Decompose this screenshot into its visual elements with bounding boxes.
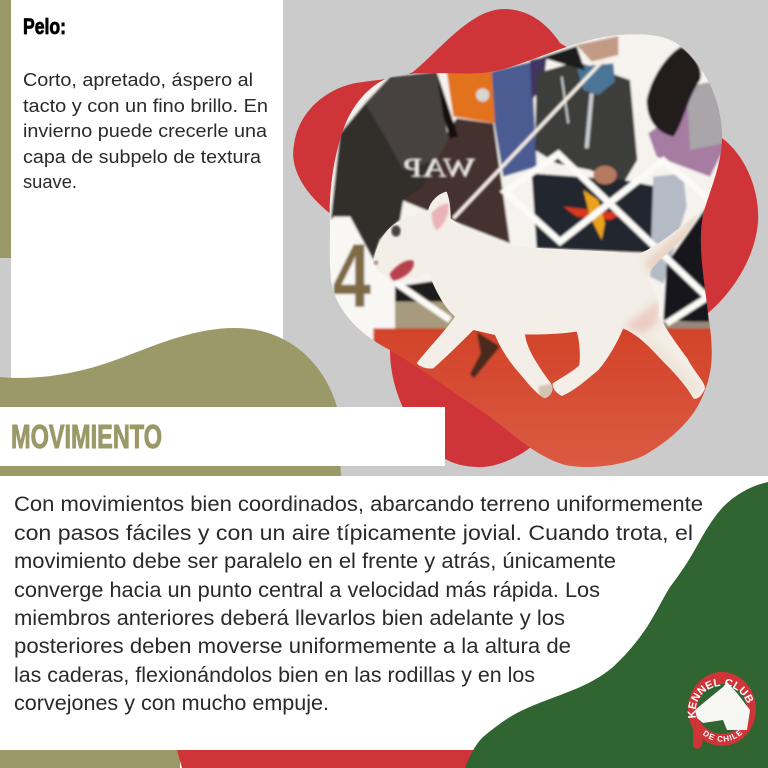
handler — [330, 102, 430, 260]
text block: pelo description — [23, 69, 268, 192]
text block: movimiento description: miembros anteriores deberá llevarlos bien adelante y los — [14, 607, 565, 630]
text block: pelo description: suave. — [23, 171, 77, 192]
green corner shape — [465, 482, 768, 768]
hanging brown object — [470, 332, 500, 378]
grey background — [0, 0, 768, 476]
logo: Kennel Club de Chile: DE CHILE — [702, 730, 742, 742]
text block: movimiento description: con pasos fáciles y con un aire típicamente jovial. Cuando trota, el — [14, 522, 693, 545]
ear — [432, 203, 449, 230]
number card: 4 — [333, 227, 371, 327]
spectators — [395, 47, 725, 330]
white lower area — [0, 476, 768, 768]
white lattice — [397, 154, 708, 323]
olive side bar — [0, 0, 11, 258]
nose — [374, 260, 378, 265]
eye — [391, 225, 401, 237]
mouth — [390, 260, 414, 281]
text block: movimiento description: corvejones y con mucho empuje. — [14, 692, 329, 715]
leash — [453, 57, 607, 218]
dog — [373, 192, 705, 400]
number card — [330, 216, 372, 308]
logo: Kennel Club de Chile — [688, 672, 756, 749]
text block: movimiento description: movimiento debe ser paralelo en el frente y atrás, únicamente — [14, 550, 616, 573]
text block: movimiento description: converge hacia un punto central a velocidad más rápida. Los — [14, 579, 600, 602]
leash tail — [693, 725, 704, 749]
handler hand — [542, 46, 585, 71]
panel: pelo — [11, 0, 283, 385]
text block: pelo description: Corto, apretado, áspero al — [23, 69, 253, 90]
red blob behind photo — [293, 9, 758, 467]
sign letters: WAP — [403, 153, 475, 183]
heading: movimiento: MOVIMIENTO — [11, 418, 162, 455]
text block: pelo description: capa de subpelo de textura — [23, 146, 262, 167]
carpet — [373, 328, 723, 475]
text block: movimiento description — [14, 493, 703, 715]
footer strip — [0, 750, 490, 768]
banner: movimiento — [0, 407, 445, 466]
olive wave shape — [0, 328, 341, 476]
text block: movimiento description: Con movimientos bien coordinados, abarcando terreno uniformemente — [14, 493, 703, 516]
heading: pelo: Pelo: — [23, 14, 66, 39]
text block: pelo description: invierno puede crecerle una — [23, 120, 268, 141]
dog shading — [538, 213, 703, 400]
dog head — [695, 682, 750, 730]
logo lettering: KENNEL CLUB — [688, 679, 754, 718]
photo: white bull terrier on red carpet — [323, 27, 725, 475]
text block: movimiento description: posteriores deben moverse uniformemente a la altura de — [14, 635, 571, 658]
text block: movimiento description: las caderas, flexionándolos bien en las rodillas y en los — [14, 664, 535, 687]
text block: pelo description: tacto y con un fino brillo. En — [23, 95, 268, 116]
